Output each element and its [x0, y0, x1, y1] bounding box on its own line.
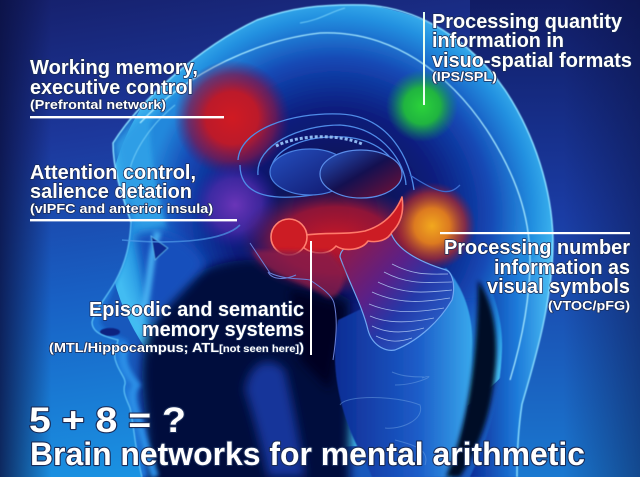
face rim	[92, 222, 142, 477]
chin highlight	[123, 345, 155, 477]
cerebellum folds	[369, 264, 452, 341]
callout: working memory: Working memory,	[30, 57, 198, 79]
thalamus left	[270, 149, 350, 195]
neck vertebrae	[340, 372, 429, 465]
callout: working memory	[30, 57, 224, 118]
callout: number symbols	[440, 232, 630, 313]
midface blue	[135, 232, 205, 325]
callout: quantity information: (IPS/SPL)	[432, 69, 497, 84]
title: 5 + 8 = ?	[29, 401, 186, 440]
eye notch	[151, 236, 168, 260]
callout: number symbols: Processing number	[444, 237, 630, 259]
callout: attention control: salience detation	[30, 181, 192, 203]
callout: quantity information: Processing quantity	[432, 11, 623, 33]
hippocampus body	[304, 197, 403, 253]
callout: episodic memory: (MTL/Hippocampus; ATL [not seen here] )	[49, 340, 304, 355]
title	[29, 401, 585, 472]
nostril	[100, 328, 120, 336]
dark gap in neck	[446, 280, 496, 477]
callout: episodic memory: Episodic and semantic	[89, 299, 304, 321]
corpus callosum arcs	[122, 114, 460, 242]
inner skull rim	[140, 33, 530, 380]
pons haze	[252, 250, 345, 298]
callout: attention control: Attention control,	[30, 162, 196, 184]
third lobe line	[128, 8, 345, 180]
front neck	[245, 362, 305, 477]
neck column	[335, 268, 472, 477]
head rim lines	[92, 5, 553, 477]
glow: insula purple	[191, 161, 279, 249]
glow: IPS green	[386, 70, 458, 142]
cheek highlight	[138, 232, 158, 322]
callout: episodic memory	[49, 241, 312, 355]
head base	[101, 6, 517, 477]
lower face shadow	[142, 260, 350, 477]
outer skull rim	[113, 5, 553, 477]
corpus callosum ticks	[276, 137, 362, 146]
title: Brain networks for mental arithmetic	[30, 436, 585, 472]
callout: episodic memory: memory systems	[142, 319, 304, 341]
callout: attention control: (vIPFC and anterior insula)	[30, 201, 213, 216]
face left glow	[92, 202, 150, 477]
cerebellum	[340, 230, 454, 350]
callout: quantity information: information in	[432, 30, 564, 52]
skull outer shell	[107, 3, 563, 447]
back of neck	[470, 240, 553, 477]
activation glows and brain structures	[122, 60, 476, 465]
callout: number symbols: (VTOC/pFG)	[548, 298, 630, 313]
callout: number symbols: visual symbols	[487, 276, 630, 298]
glow: prefrontal red	[174, 60, 290, 176]
pons outline	[250, 243, 336, 360]
callout: attention control	[30, 162, 237, 221]
callout: quantity information: visuo-spatial formats	[432, 50, 632, 72]
glow: VTOC orange	[388, 182, 476, 270]
callout: working memory: (Prefrontal network)	[30, 97, 166, 112]
callout: quantity information	[423, 11, 632, 105]
hippocampus head	[271, 219, 307, 255]
head illustration	[80, 0, 563, 477]
callout: number symbols: information as	[494, 257, 630, 279]
thalamus right	[320, 150, 402, 198]
glow: deep red	[240, 185, 430, 295]
dark throat core	[290, 290, 345, 390]
forehead lobe glow	[114, 112, 168, 234]
callout: working memory: executive control	[30, 77, 193, 99]
skull inner layer	[150, 108, 189, 228]
